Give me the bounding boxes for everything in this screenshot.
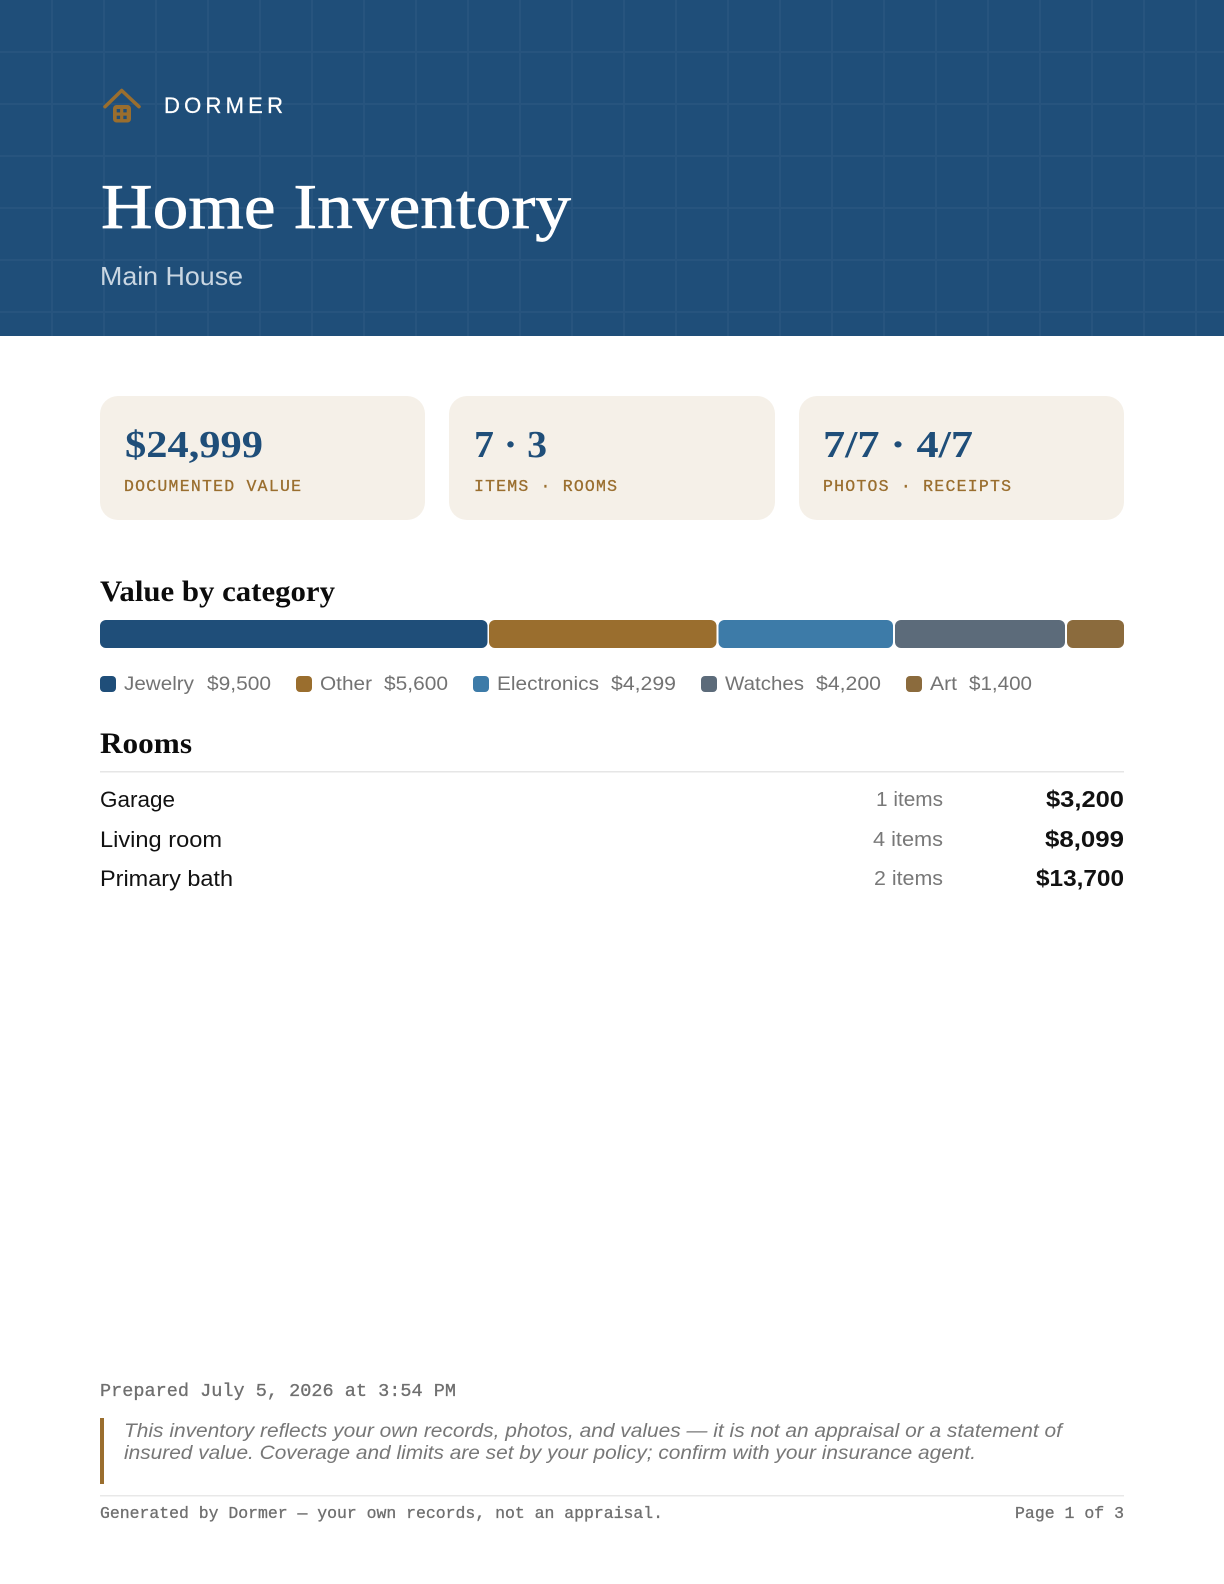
stat card: documented value: DOCUMENTED VALUE: [124, 477, 301, 496]
heading: rooms: Rooms: [100, 727, 192, 760]
brand name: DORMER: [164, 93, 283, 118]
row: garage: [100, 786, 1124, 812]
row: primary bath: $13,700: [1036, 865, 1124, 891]
legend: $9,500: [207, 673, 271, 695]
row: primary bath: Primary bath: [100, 866, 233, 891]
row: garage: Garage: [100, 787, 175, 812]
subtitle: Main House: [100, 261, 243, 291]
row: primary bath: [100, 865, 1124, 891]
legend: Art: [930, 673, 958, 695]
row: living room: $8,099: [1045, 826, 1124, 852]
stat card: documented value: [100, 396, 425, 520]
legend: Watches: [725, 673, 804, 695]
legend: $4,200: [816, 673, 881, 695]
stat card: items and rooms: 7 · 3: [474, 424, 547, 466]
title: Home Inventory: [101, 172, 572, 242]
footer right: page number: Page 1 of 3: [1015, 1504, 1124, 1523]
legend: [100, 673, 1032, 695]
stat card: documented value: $24,999: [125, 424, 263, 466]
footer left: Generated by Dormer — your own records, not an appraisal.: [100, 1504, 663, 1523]
legend: Electronics: [497, 673, 599, 695]
legend: $1,400: [969, 673, 1032, 695]
legend: $4,299: [611, 673, 676, 695]
legend: Other: [320, 673, 373, 695]
prepared date: Prepared July 5, 2026 at 3:54 PM: [100, 1381, 456, 1402]
row: living room: [100, 826, 1124, 852]
header band: [0, 0, 1224, 336]
legend: Jewelry: [124, 673, 194, 695]
stat card: items and rooms: ITEMS · ROOMS: [474, 477, 617, 496]
heading: value by category: Value by category: [100, 575, 335, 608]
disclaimer note: [100, 1418, 1065, 1484]
row: garage: 1 items: [876, 789, 943, 811]
stat card: photos and receipts: [799, 396, 1124, 520]
stat card: items and rooms: [449, 396, 775, 520]
row: primary bath: 2 items: [874, 868, 943, 890]
stat card: photos and receipts: PHOTOS · RECEIPTS: [823, 477, 1011, 496]
room rows table: [100, 786, 1124, 891]
legend: $5,600: [384, 673, 448, 695]
row: garage: $3,200: [1046, 786, 1124, 812]
disclaimer note: insured value. Coverage and limits are set by your policy; confirm with your insurance agent.: [124, 1442, 976, 1464]
stat card: photos and receipts: 7/7 · 4/7: [823, 424, 973, 466]
disclaimer note: This inventory reflects your own records, photos, and values — it is not an appraisal or a statement of: [124, 1420, 1065, 1442]
row: living room: 4 items: [873, 829, 943, 851]
icon: house logo: [105, 90, 139, 122]
row: living room: Living room: [100, 827, 222, 852]
stacked bar chart: [100, 620, 1124, 648]
